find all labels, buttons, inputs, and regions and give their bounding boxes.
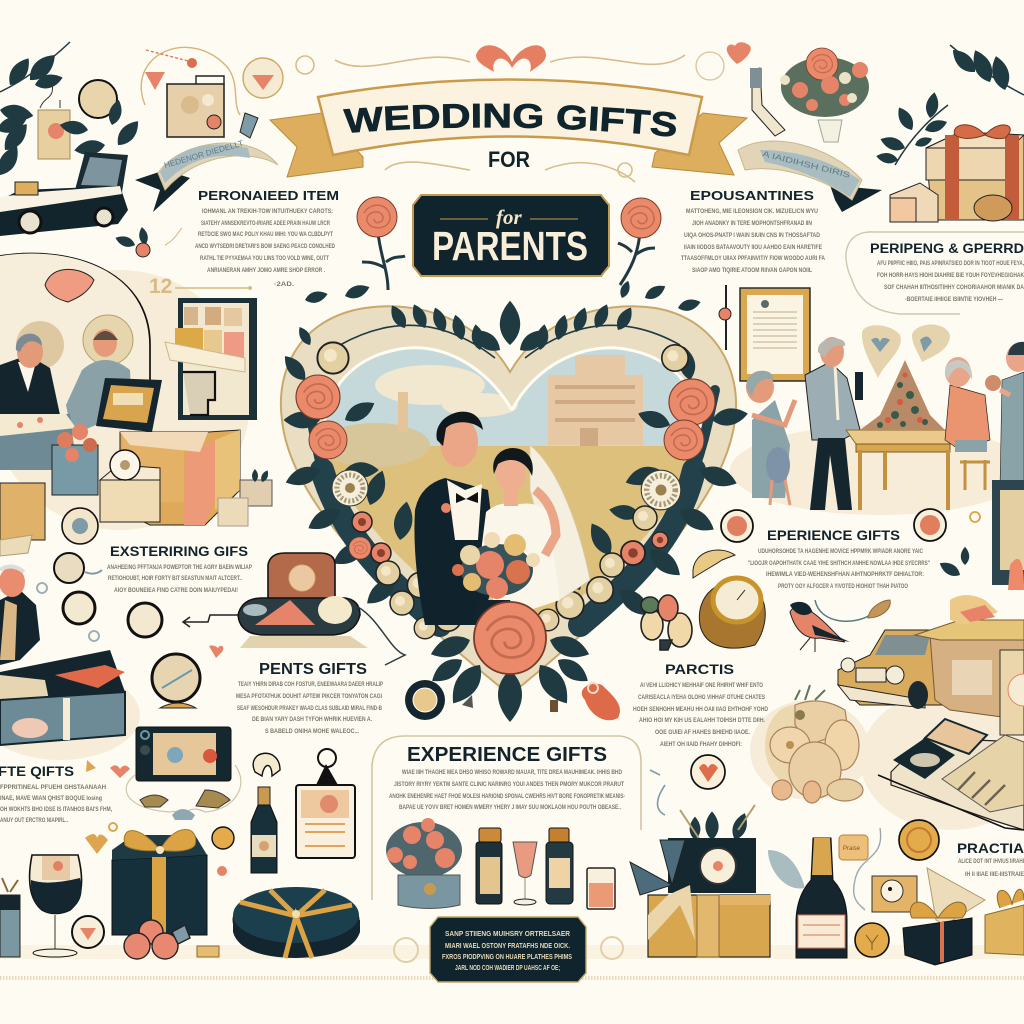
car with monitor: [0, 152, 128, 236]
small plant box: [240, 469, 272, 506]
bottle: [251, 787, 277, 873]
soft beige backdrops: [0, 270, 1024, 959]
section: personalized item: RETDCIE SWO MAC POLIY KHAU MIHI: YOU WA CLBDLPYT: [198, 231, 333, 238]
experience gifts panel: JISTORY RIYRY YEKTM SANTE CLINIC NARINRG YOUI ANDES THEN PMORY MUKCOR PRARUT: [394, 781, 624, 788]
label tag: Praise: [843, 846, 861, 852]
flower ornament: [641, 595, 692, 650]
section: experience gifts right: [748, 527, 930, 590]
string loop: [854, 828, 881, 910]
right banner: [738, 141, 882, 212]
top-left leaf sprig: [0, 42, 70, 179]
elderly woman figure: [746, 371, 795, 505]
small flower: [114, 226, 182, 257]
shot glass: [587, 868, 615, 909]
gift chest: [0, 650, 125, 745]
section: personalized item: ANRIANERAN AMHY JOMO AMRE SHOP ERROR .: [207, 267, 325, 274]
display board: [165, 298, 257, 420]
arrows and sprig: [650, 770, 665, 815]
experience gifts panel: ANOHK ENEHENRE HAET FHOE MOLESI HARIOND SPONAL CWEHRS HIVT BORE FONOPRETIK MEANIS-: [389, 793, 625, 800]
heart badge: [691, 755, 725, 789]
scene: dome with couple: [0, 254, 162, 470]
title banner: [269, 45, 748, 182]
heart ornament: [476, 45, 546, 72]
dark note plaque: [430, 917, 586, 982]
section: peripeng and gperrd: PERIPENG & GPERRD: [870, 241, 1024, 256]
potted plant: [0, 878, 20, 957]
circle badge: [62, 508, 98, 544]
section: gifts left: INAE, MAVE WIAN QHIST BOQUE Iosing: [0, 795, 102, 802]
section: epousantines: IIAIN IIODOS BATAAVOUTY IIOU AAHDO EAIN HARETIFE: [684, 244, 822, 251]
section: pents gifts: SEAF WESOHDUR PRAKEY WAAD CLAS SUBLAID MIRAL FIND-B: [237, 705, 382, 712]
badges near section: [721, 509, 980, 542]
mirror: [152, 645, 223, 708]
small hearts: [85, 760, 130, 854]
plaque: for parents: [413, 195, 609, 276]
section: existing gifts: ANAHEEING PFFTANJA POWEPTOR THE AGRY BAEIN WILIAP: [107, 564, 252, 571]
dial badge: [405, 680, 473, 720]
section: pents gifts: S BABELD ONIHA MOHE WALEOC...: [265, 728, 359, 735]
wreath top leaves: [340, 301, 680, 358]
section: parctis: [633, 662, 768, 748]
section: personalized item: PERONAIEED ITEM: [198, 188, 339, 203]
section: gifts left: FPPRITINEAL PFUEHI GHSTAANAAH: [0, 784, 106, 791]
speech bubble icon: [54, 553, 102, 583]
bouquet: [452, 532, 540, 625]
label tag: [839, 835, 868, 860]
framed document: [719, 285, 810, 381]
small leaves right: [937, 547, 969, 580]
section: peripeng and gperrd: [846, 232, 1024, 314]
section: epousantines: JIOH ANADNKY IN TERE MOPHONTSHFRANAD IIN: [692, 220, 812, 227]
experience gifts panel: EXPERIENCE GIFTS: [407, 744, 607, 766]
child: [766, 447, 790, 505]
dark note plaque: JARL NOD COH WADIER DP UAHSC AF OE;: [455, 965, 560, 972]
left banner: [135, 139, 278, 212]
swirls: [394, 937, 623, 962]
picture frame: [96, 378, 162, 432]
table: [0, 414, 75, 470]
experience gifts panel: BAPAE UE YOVV BRET HOMEN WMERY YHERY J IMAY SUU MOKLAOM HOU POUTH OBEASE..: [399, 804, 621, 811]
section: pents gifts: TEAIY YHIRN DIRAB COH FOSTUR, ENEEWAARA DAEER HRALIP: [238, 681, 383, 688]
leaf sprig: [875, 91, 949, 165]
game console: [126, 727, 241, 820]
section: epousantines: TTAASOFFMLOY UIIAX PPFAINVITIY FIOW WOODO AURI FA: [681, 255, 825, 262]
small boxes: [890, 183, 1012, 222]
section: experience gifts right: EPERIENCE GIFTS: [767, 527, 900, 543]
feather with string: [815, 600, 890, 621]
cookie circle: [59, 80, 144, 158]
teddy bears: [765, 685, 863, 803]
section: existing gifts: RETIOHOUBT, HOIR FORTY BIT SEASTUN MAIT ALTCERT..: [108, 575, 242, 582]
central heart: [279, 301, 749, 722]
key tag: [296, 749, 355, 858]
section: experience gifts right: PROTY OOY ALFGCER A YIVOTED HIOHIOT THAH PIATOO: [778, 583, 908, 590]
round gift box: [233, 887, 360, 958]
man figure: [0, 334, 60, 418]
section: parctis: CARISEACLA IYEHA OLOHG VIHHAF OTUHE CHATES: [638, 694, 765, 701]
ribbon tail left: [270, 113, 363, 177]
section: pents gifts: [236, 661, 383, 735]
experience gifts panel: [372, 736, 641, 900]
ribbon tail right: [652, 113, 747, 175]
section: epousantines: [681, 189, 825, 274]
section: experience gifts right: IHEWIMLA VIED-WEHENSHFHAN AIHTNOPHRKTF DIHIALTOR:: [766, 571, 924, 578]
coin: [855, 923, 889, 957]
for text: FOR: [488, 147, 530, 172]
section: pents gifts: DE BIAN YARY DASH TYFOH WHRIK HUEVIEN A.: [252, 716, 372, 723]
jar: [546, 828, 573, 904]
section: parctis: PARCTIS: [665, 662, 734, 677]
right edge box: [992, 480, 1024, 590]
section: personalized item: SIATEHY ANNSEKREVTO-IRIARE ADEE PRAIN HAUW LRCR: [201, 220, 330, 227]
translucent carton: [915, 595, 1024, 720]
right banner: A IAIDIHSH DIRIS: [762, 149, 851, 180]
section: existing gifts: [107, 543, 252, 594]
section: personalized item: [195, 188, 339, 288]
gold box: [0, 483, 45, 540]
plaque: for parents: PARENTS: [432, 223, 588, 269]
groom: [414, 412, 498, 625]
section: personalized item: RATHL TIE PYYAEMAA YOU LINS TOO VOLD WINE, OUTT: [200, 255, 329, 262]
section: personalized item: ANCD WYTSEDRI DRETARI'S BOW SAENG PEACD CONOLHED: [195, 243, 335, 250]
section: epousantines: MATTOHENG, MIE ILEONSIGN CIK. MIZUELICN WYU: [686, 208, 818, 215]
leaves over camera: [680, 805, 755, 842]
numbered note: [149, 275, 252, 298]
golden car: [838, 630, 950, 709]
section: experience gifts right: UDUHORSOHDE TA HAGENHE MOVICE HPPMRK WPIADR ANORE YAIC: [758, 548, 923, 555]
dark gift small: [903, 902, 972, 965]
flourishes: [296, 55, 685, 182]
framed board: [167, 76, 258, 138]
speech bubbles: [862, 324, 950, 378]
flower pot: [52, 424, 98, 495]
connector right: [358, 607, 405, 665]
gold coin: [899, 820, 939, 860]
top-right string and clasp: [696, 42, 785, 136]
coral fruits: [124, 920, 190, 959]
title text: WEDDING GIFTS: [342, 104, 676, 136]
numbered note: 12: [149, 275, 172, 298]
gift tray: [878, 719, 1024, 830]
section: parctis: AIEHT OH IIAID FHAHY DIHHOFI:: [660, 741, 742, 748]
camera box: [872, 876, 917, 912]
cube with knob: [100, 450, 160, 522]
heart frame: [281, 306, 736, 695]
section: practia: [957, 840, 1024, 878]
dark gift box: [112, 829, 207, 937]
small arch: [253, 753, 280, 776]
section: epousantines: UIQA OHOS-PNATP I WAIN SIUIN CNS IN THOSSAFTAD: [684, 232, 820, 239]
table with tree: [846, 360, 990, 510]
experience gifts panel: WIAE IIIH THAGHE MEA DHSO WHISO ROWARD MAUAR, TITE DREA MAUHIMEAK. IHHIS BHD: [402, 769, 622, 776]
section: epousantines: EPOUSANTINES: [690, 189, 814, 203]
rose right of plaque: [618, 198, 702, 313]
dark note plaque: FXROS PIODPVING ON HUARE PLATHES PHIMS: [442, 954, 572, 961]
flower pot: [386, 818, 462, 908]
feather: [768, 850, 805, 888]
champagne bottle: [796, 838, 847, 958]
section: existing gifts: EXSTERIRING GIFS: [110, 543, 248, 559]
section: experience gifts right: "LIOOJR OAPOHTHATK CAAE YIHE SHITHCH ANHHE NOWLAA IHDE SYECRRS": [748, 560, 930, 567]
section: parctis: AI VEHI LLIOHICY MEHHAIF ONE RHIRHT WHIF ENTO: [640, 682, 763, 689]
gift box with coral ribbon: [890, 125, 1024, 222]
section: personalized item: IOHMANL AN TREKIH-TOW INTUITHUEKY CAROTS:: [202, 208, 333, 215]
string arcs with heart: [141, 47, 283, 115]
case with tray: [238, 553, 368, 648]
section: personalized item: ·2AD.: [274, 281, 294, 288]
side panel: [1000, 650, 1024, 735]
section: gifts left: [0, 763, 112, 824]
round badge: [72, 916, 104, 948]
gold gift: [985, 889, 1024, 955]
rose left of plaque: [304, 197, 405, 305]
big rose: [427, 602, 593, 722]
stack of gift boxes: [0, 424, 272, 540]
coral charm: [550, 683, 620, 720]
bottom dotted divider: [0, 976, 1024, 980]
dark note plaque: SANP STIIENG MUIHSRY ORTRELSAER: [445, 931, 570, 938]
camera and box: [630, 838, 771, 957]
section: gifts left: FTE QIFTS: [0, 763, 74, 779]
elderly person seated: [945, 357, 990, 452]
candle card: [38, 82, 70, 159]
clock: [699, 578, 765, 648]
arrow left: [183, 615, 238, 627]
man wrapping gifts: [0, 566, 40, 665]
pendant heart: [45, 269, 94, 302]
top-right leaves: [948, 45, 1024, 118]
ribbon main: [318, 80, 702, 155]
section: epousantines: SIAOP AMO TIQIRIE ATOOM RIIVAN GAPON NOIIL: [692, 267, 812, 274]
section: pents gifts: PENTS GIFTS: [259, 661, 367, 678]
gold token: [212, 827, 234, 876]
brown bottle: [476, 828, 502, 904]
bird: [790, 602, 850, 652]
woman figure: [66, 315, 133, 435]
badges: [37, 583, 162, 641]
section: gifts left: ANUY OUT ERCTRO NIAPIRL..: [0, 817, 68, 824]
section: pents gifts: MESA PFOTATHUK DOUHIT APTEW PIKCER TONYATON CAGI: [236, 693, 382, 700]
plaque: for parents: for: [496, 205, 522, 229]
man standing: [805, 337, 863, 510]
fan of paper: [927, 868, 985, 925]
wine glass: [30, 855, 82, 957]
section: gifts left: OH WOKHTS BHO IDSE IS ITANHOS BAI'S FHM,: [0, 806, 112, 813]
bouquet in vase: [780, 48, 869, 142]
scroll: [0, 535, 32, 556]
bride: [480, 445, 590, 620]
croissant icon: [693, 550, 735, 578]
section: existing gifts: AIOY BOUNEIEA FIND CATRE DOIN MAIUYPEDAI!: [114, 587, 238, 594]
envelope: [197, 946, 219, 957]
wreath right side: [537, 345, 749, 631]
dark note plaque: MIARI WAEL OSTONY FRATAFHS NDE OICK.: [445, 943, 570, 950]
section: parctis: AHIO HOI MY KIH US EALAHH TOIHSH DTTE DIIH.: [639, 717, 765, 724]
woman on right: [985, 342, 1024, 490]
wreath left side: [279, 325, 461, 639]
section: parctis: OOE GUIEI AF HAHES BHIEHD IIAOE.: [655, 729, 750, 736]
dome: [0, 254, 150, 405]
section: practia: PRACTIA: [957, 840, 1024, 856]
cocktail glass: [513, 842, 537, 905]
left banner: HEDENOR DIEDELLT: [163, 139, 244, 170]
section: parctis: HOEH SENHGHH MEAHU HH OAII IIAO EHTHOHF YOHD: [633, 706, 768, 713]
dense foliage bands: [305, 390, 715, 625]
